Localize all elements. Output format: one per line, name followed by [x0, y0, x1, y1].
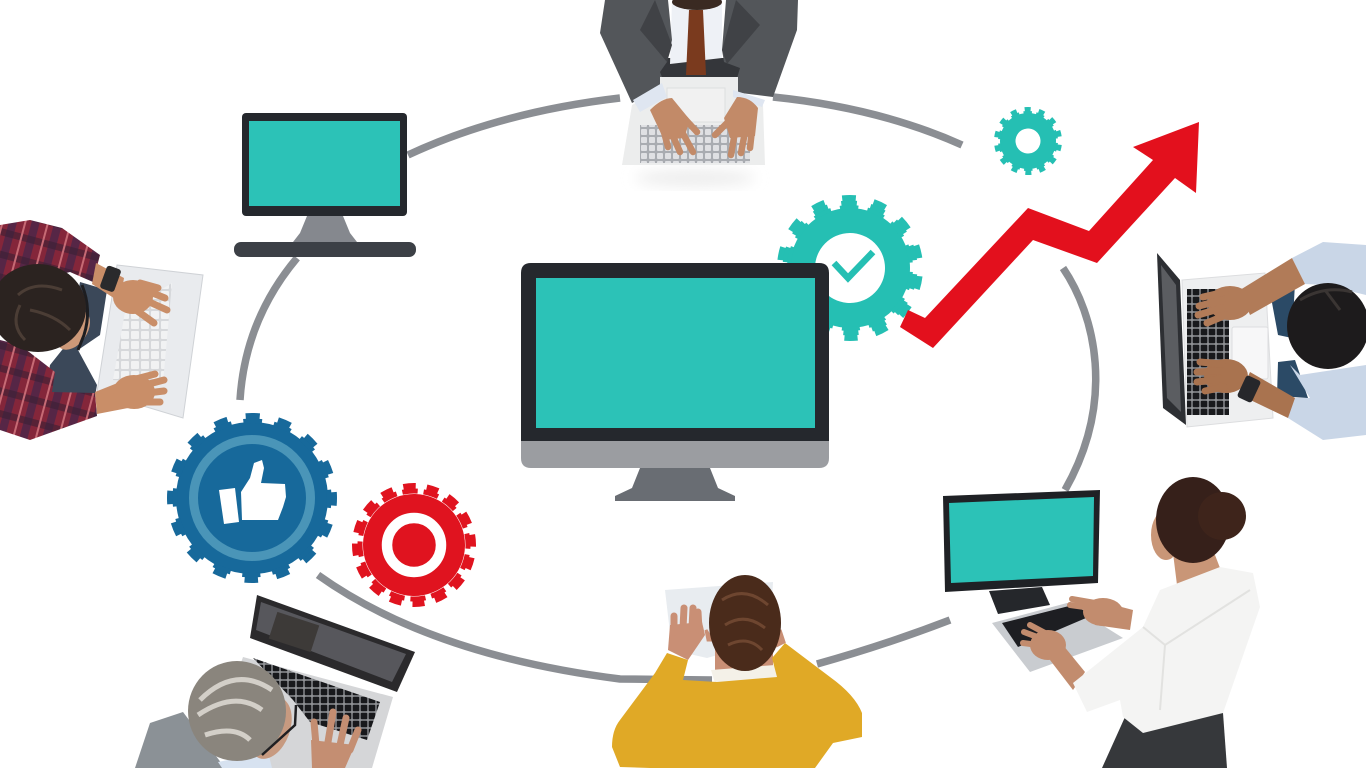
hair curls: [722, 594, 768, 650]
face: [240, 691, 300, 765]
person: woman at monitor on bottom right: [943, 477, 1260, 768]
hair: [709, 575, 781, 671]
shirt cuffs: [633, 83, 667, 112]
hair: [1156, 477, 1230, 563]
glasses: [78, 285, 88, 350]
white blouse: [1073, 567, 1260, 733]
keyboard: [1002, 605, 1093, 647]
jacket: [135, 712, 225, 768]
touchpad: [1232, 327, 1268, 379]
laptop base: [235, 657, 393, 768]
vest: [1270, 283, 1308, 398]
monitor screen: [536, 278, 815, 428]
glasses: [262, 705, 296, 755]
keyboard: [253, 658, 380, 740]
arrow: rising red trend: [900, 122, 1199, 348]
monitor bezel: [521, 263, 829, 441]
hand: [668, 608, 705, 660]
bezel: [242, 113, 407, 216]
watch: [1237, 375, 1261, 403]
screen thumbnail: [269, 612, 319, 652]
laptop: [992, 603, 1123, 672]
icon: blue gear with thumbs up: [164, 410, 340, 586]
paper document: [665, 582, 773, 658]
monitor bezel: [943, 490, 1100, 592]
hair: [1287, 283, 1366, 369]
hair: [0, 264, 86, 352]
monitor stand: [989, 587, 1050, 614]
icon: red target gear: [346, 477, 482, 613]
face: [49, 304, 97, 356]
arms: [92, 263, 124, 302]
person: man in plaid shirt on left: [0, 220, 203, 440]
torso and collar: [45, 282, 107, 396]
top-left desktop monitor: [234, 113, 416, 257]
watch: [99, 265, 122, 293]
lapels: [640, 0, 760, 64]
lower hand: [113, 374, 164, 409]
central desktop monitor: [521, 263, 829, 501]
laptop base: [1182, 273, 1273, 427]
face: [1151, 510, 1181, 560]
ears: [706, 630, 784, 645]
base bar: [234, 242, 416, 257]
light blue shirt: [1288, 242, 1366, 440]
hair highlights: [16, 286, 70, 340]
blouse folds: [1143, 590, 1250, 710]
upper hand: [1070, 598, 1123, 626]
screen: [249, 121, 400, 206]
icon: small teal gear: [993, 106, 1063, 176]
upper arm: [1240, 258, 1305, 315]
hair bun: [1198, 492, 1246, 540]
yellow jacket: [612, 643, 862, 768]
touchpad: [667, 88, 725, 122]
hand: [311, 712, 358, 768]
icon: teal gear with check mark: [773, 191, 927, 345]
head shadow: [672, 0, 722, 10]
hair: [188, 661, 286, 761]
skirt: [1102, 713, 1227, 768]
upper hand: [113, 280, 167, 323]
keyboard: [640, 125, 750, 163]
right hand: [715, 97, 758, 155]
person: man with yellow jacket at bottom: [612, 575, 862, 768]
stand: [293, 216, 357, 242]
laptop screen: [1157, 253, 1186, 425]
shirt collar: [218, 752, 272, 768]
arms: [1050, 645, 1085, 690]
upper hand: [1198, 286, 1252, 323]
neck: [715, 645, 773, 675]
monitor screen: [949, 497, 1094, 583]
lower arm: [1240, 372, 1295, 418]
suit jacket: [600, 0, 798, 103]
lower hand: [1197, 359, 1248, 393]
keyboard: [1187, 289, 1229, 415]
monitor chin: [521, 438, 829, 468]
laptop screen: [250, 595, 415, 692]
waist: [655, 58, 740, 80]
hair highlights: [198, 680, 272, 740]
laptop: [97, 265, 203, 418]
shirt: [670, 0, 722, 64]
collar: [711, 665, 777, 683]
lower hand: [1023, 625, 1066, 660]
laptop: [622, 77, 765, 165]
person: man in suit at top: [600, 0, 798, 186]
person: grey-haired man at bottom left: [135, 595, 415, 768]
plaid shirt: [0, 220, 100, 440]
hair detail: [1300, 290, 1352, 310]
ring of grey connecting arcs: [240, 97, 1096, 680]
left hand: [650, 98, 697, 152]
laptop shadow: [635, 170, 755, 186]
monitor stand: [615, 468, 735, 501]
tie: [686, 10, 706, 75]
person: man in blue shirt on right: [1157, 242, 1366, 440]
neck: [1172, 545, 1220, 585]
keyboard: [113, 283, 172, 383]
